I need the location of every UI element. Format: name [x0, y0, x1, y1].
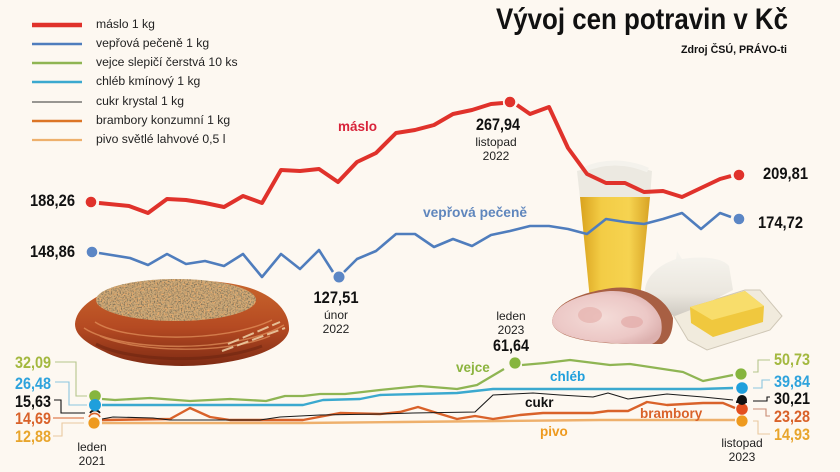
value: máslo peak: listopad	[475, 135, 517, 149]
connectors: left	[53, 362, 87, 436]
value: máslo end: 209,81	[763, 165, 808, 183]
values: left column: 15,63	[15, 393, 51, 411]
value: vejce peak: leden	[496, 309, 526, 323]
line: brambory	[89, 402, 748, 420]
values: right column: 30,21	[774, 390, 810, 408]
line: pivo	[88, 415, 748, 429]
date: start: leden	[77, 440, 107, 454]
series label: brambory: brambory	[640, 406, 703, 421]
values: right column: 50,73	[774, 351, 810, 369]
series label: cukr: cukr	[525, 395, 554, 410]
values: left column: 26,48	[15, 375, 51, 393]
values: right column: 39,84	[774, 373, 811, 391]
connectors: right	[753, 360, 770, 434]
value: pečeně low: únor	[324, 308, 348, 322]
legend item: máslo	[32, 17, 155, 31]
line: máslo	[86, 97, 744, 213]
legend item: chléb: chléb kmínový 1 kg	[96, 74, 200, 88]
illustration: butter dish	[645, 251, 782, 350]
date: end: 2023	[729, 450, 756, 464]
values: left column: 14,69	[15, 410, 51, 428]
value: pečeně start: 148,86	[30, 243, 75, 261]
date: start: 2021	[79, 454, 106, 468]
date: start	[77, 440, 107, 468]
legend item: máslo: máslo 1 kg	[96, 17, 155, 31]
value: pečeně low	[314, 289, 358, 336]
value: vejce peak	[493, 309, 530, 355]
title: Vývoj cen potravin v Kč	[496, 3, 788, 36]
line: vepřová pečeně	[87, 213, 744, 282]
line: vejce	[89, 357, 747, 402]
source note: Zdroj ČSÚ, PRÁVO-ti	[681, 43, 787, 56]
illustration: ham	[552, 288, 673, 344]
value: máslo peak	[475, 116, 521, 163]
legend	[32, 17, 238, 146]
values: right column: 14,93	[774, 426, 810, 444]
series label: pivo: pivo	[540, 424, 568, 439]
value: pečeně low: 127,51	[314, 289, 358, 307]
values: right column: 23,28	[774, 408, 810, 426]
line: chléb	[89, 382, 748, 411]
values: right column	[774, 351, 811, 444]
values: left column: 12,88	[15, 428, 51, 446]
series label: vepřová pečeně: vepřová pečeně	[423, 205, 527, 220]
series label: chléb: chléb	[550, 369, 585, 384]
illustration: beer glass	[577, 163, 652, 300]
date: end: listopad	[721, 436, 763, 450]
values: left column	[15, 354, 51, 446]
legend item: vepřová pečeně: vepřová pečeně 1 kg	[96, 36, 209, 50]
legend item: brambory: brambory konzumní 1 kg	[96, 113, 230, 127]
value: vejce peak: 61,64	[493, 337, 530, 355]
value: máslo peak: 2022	[483, 149, 510, 163]
value: pečeně low: 2022	[323, 322, 350, 336]
series label: vejce: vejce	[456, 360, 490, 375]
value: pečeně end: 174,72	[758, 214, 803, 232]
date: end	[721, 436, 763, 464]
values: left column: 32,09	[15, 354, 51, 372]
line: cukr	[90, 393, 747, 420]
illustration: bread	[75, 279, 289, 366]
legend item: vejce: vejce slepičí čerstvá 10 ks	[96, 55, 238, 69]
value: máslo peak: 267,94	[476, 116, 521, 134]
series label: máslo: máslo	[338, 119, 377, 134]
value: vejce peak: 2023	[498, 323, 525, 337]
legend item: cukr: cukr krystal 1 kg	[96, 94, 184, 108]
value: máslo start: 188,26	[30, 192, 75, 210]
legend item: pivo: pivo světlé lahvové 0,5 l	[96, 132, 225, 146]
